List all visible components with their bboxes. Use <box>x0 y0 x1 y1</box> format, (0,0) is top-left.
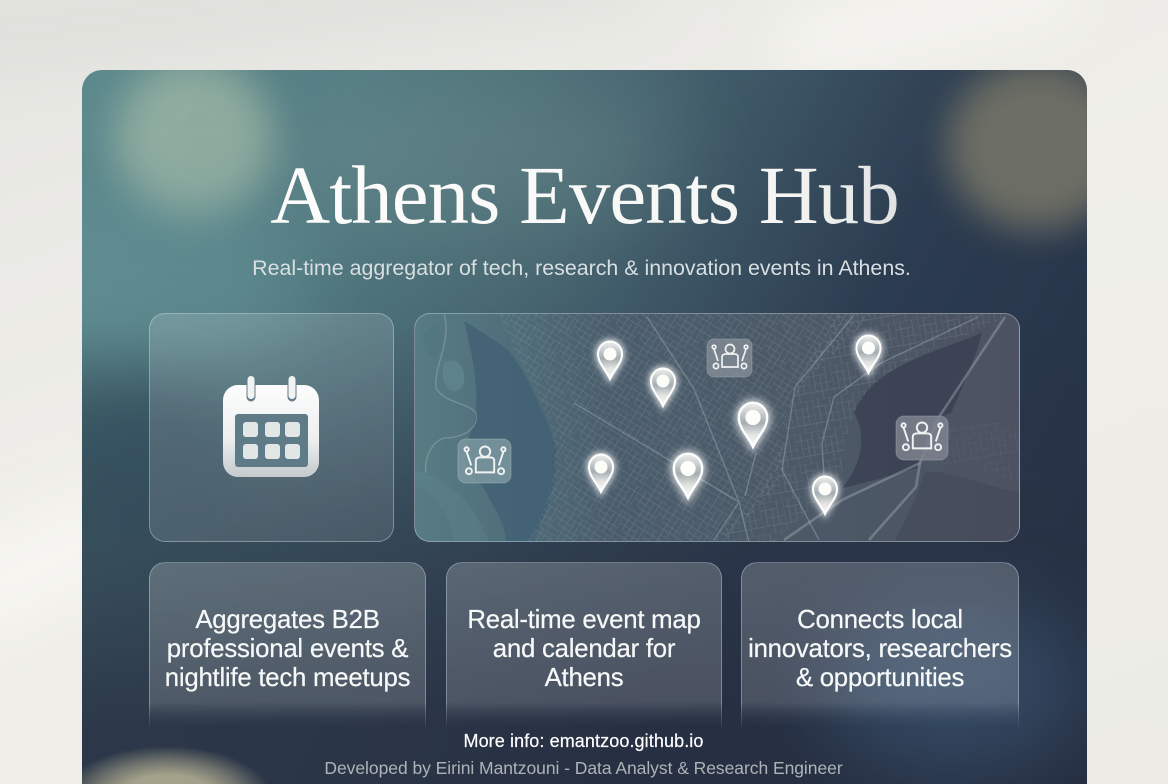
main roads <box>426 313 978 542</box>
feature text: Connects local <box>797 606 963 634</box>
feature text: Aggregates B2B <box>195 606 380 634</box>
event pins <box>589 336 880 514</box>
network icons <box>458 339 948 483</box>
panel: connects <box>741 562 1019 726</box>
feature text <box>166 610 410 692</box>
feature text <box>750 608 1012 692</box>
feature text: innovators, researchers <box>748 635 1012 663</box>
main dark panel <box>82 70 1087 784</box>
icon: calendar <box>223 376 319 477</box>
more info line: More info: emantzoo.github.io <box>463 731 704 751</box>
panel: aggregates <box>149 562 426 726</box>
map illustration <box>425 314 1019 541</box>
subtitle: Real-time aggregator of tech, research & innovation events in Athens. <box>252 256 911 280</box>
panel: event map <box>446 562 722 726</box>
title: Athens Events Hub <box>270 149 899 241</box>
title <box>82 150 1087 240</box>
feature text: & opportunities <box>796 664 964 692</box>
feature text: nightlife tech meetups <box>165 664 410 692</box>
feature text: professional events & <box>167 635 408 663</box>
street blocks <box>499 313 1020 542</box>
water and land <box>414 321 1020 542</box>
credit line: Developed by Eirini Mantzouni - Data Analyst & Research Engineer <box>324 758 843 778</box>
feature text: Athens <box>545 664 623 692</box>
panel: calendar <box>149 313 394 542</box>
panel: map <box>414 313 1020 542</box>
feature text: Real-time event map <box>467 606 701 634</box>
feature text: and calendar for <box>493 635 675 663</box>
feature text <box>469 608 700 686</box>
